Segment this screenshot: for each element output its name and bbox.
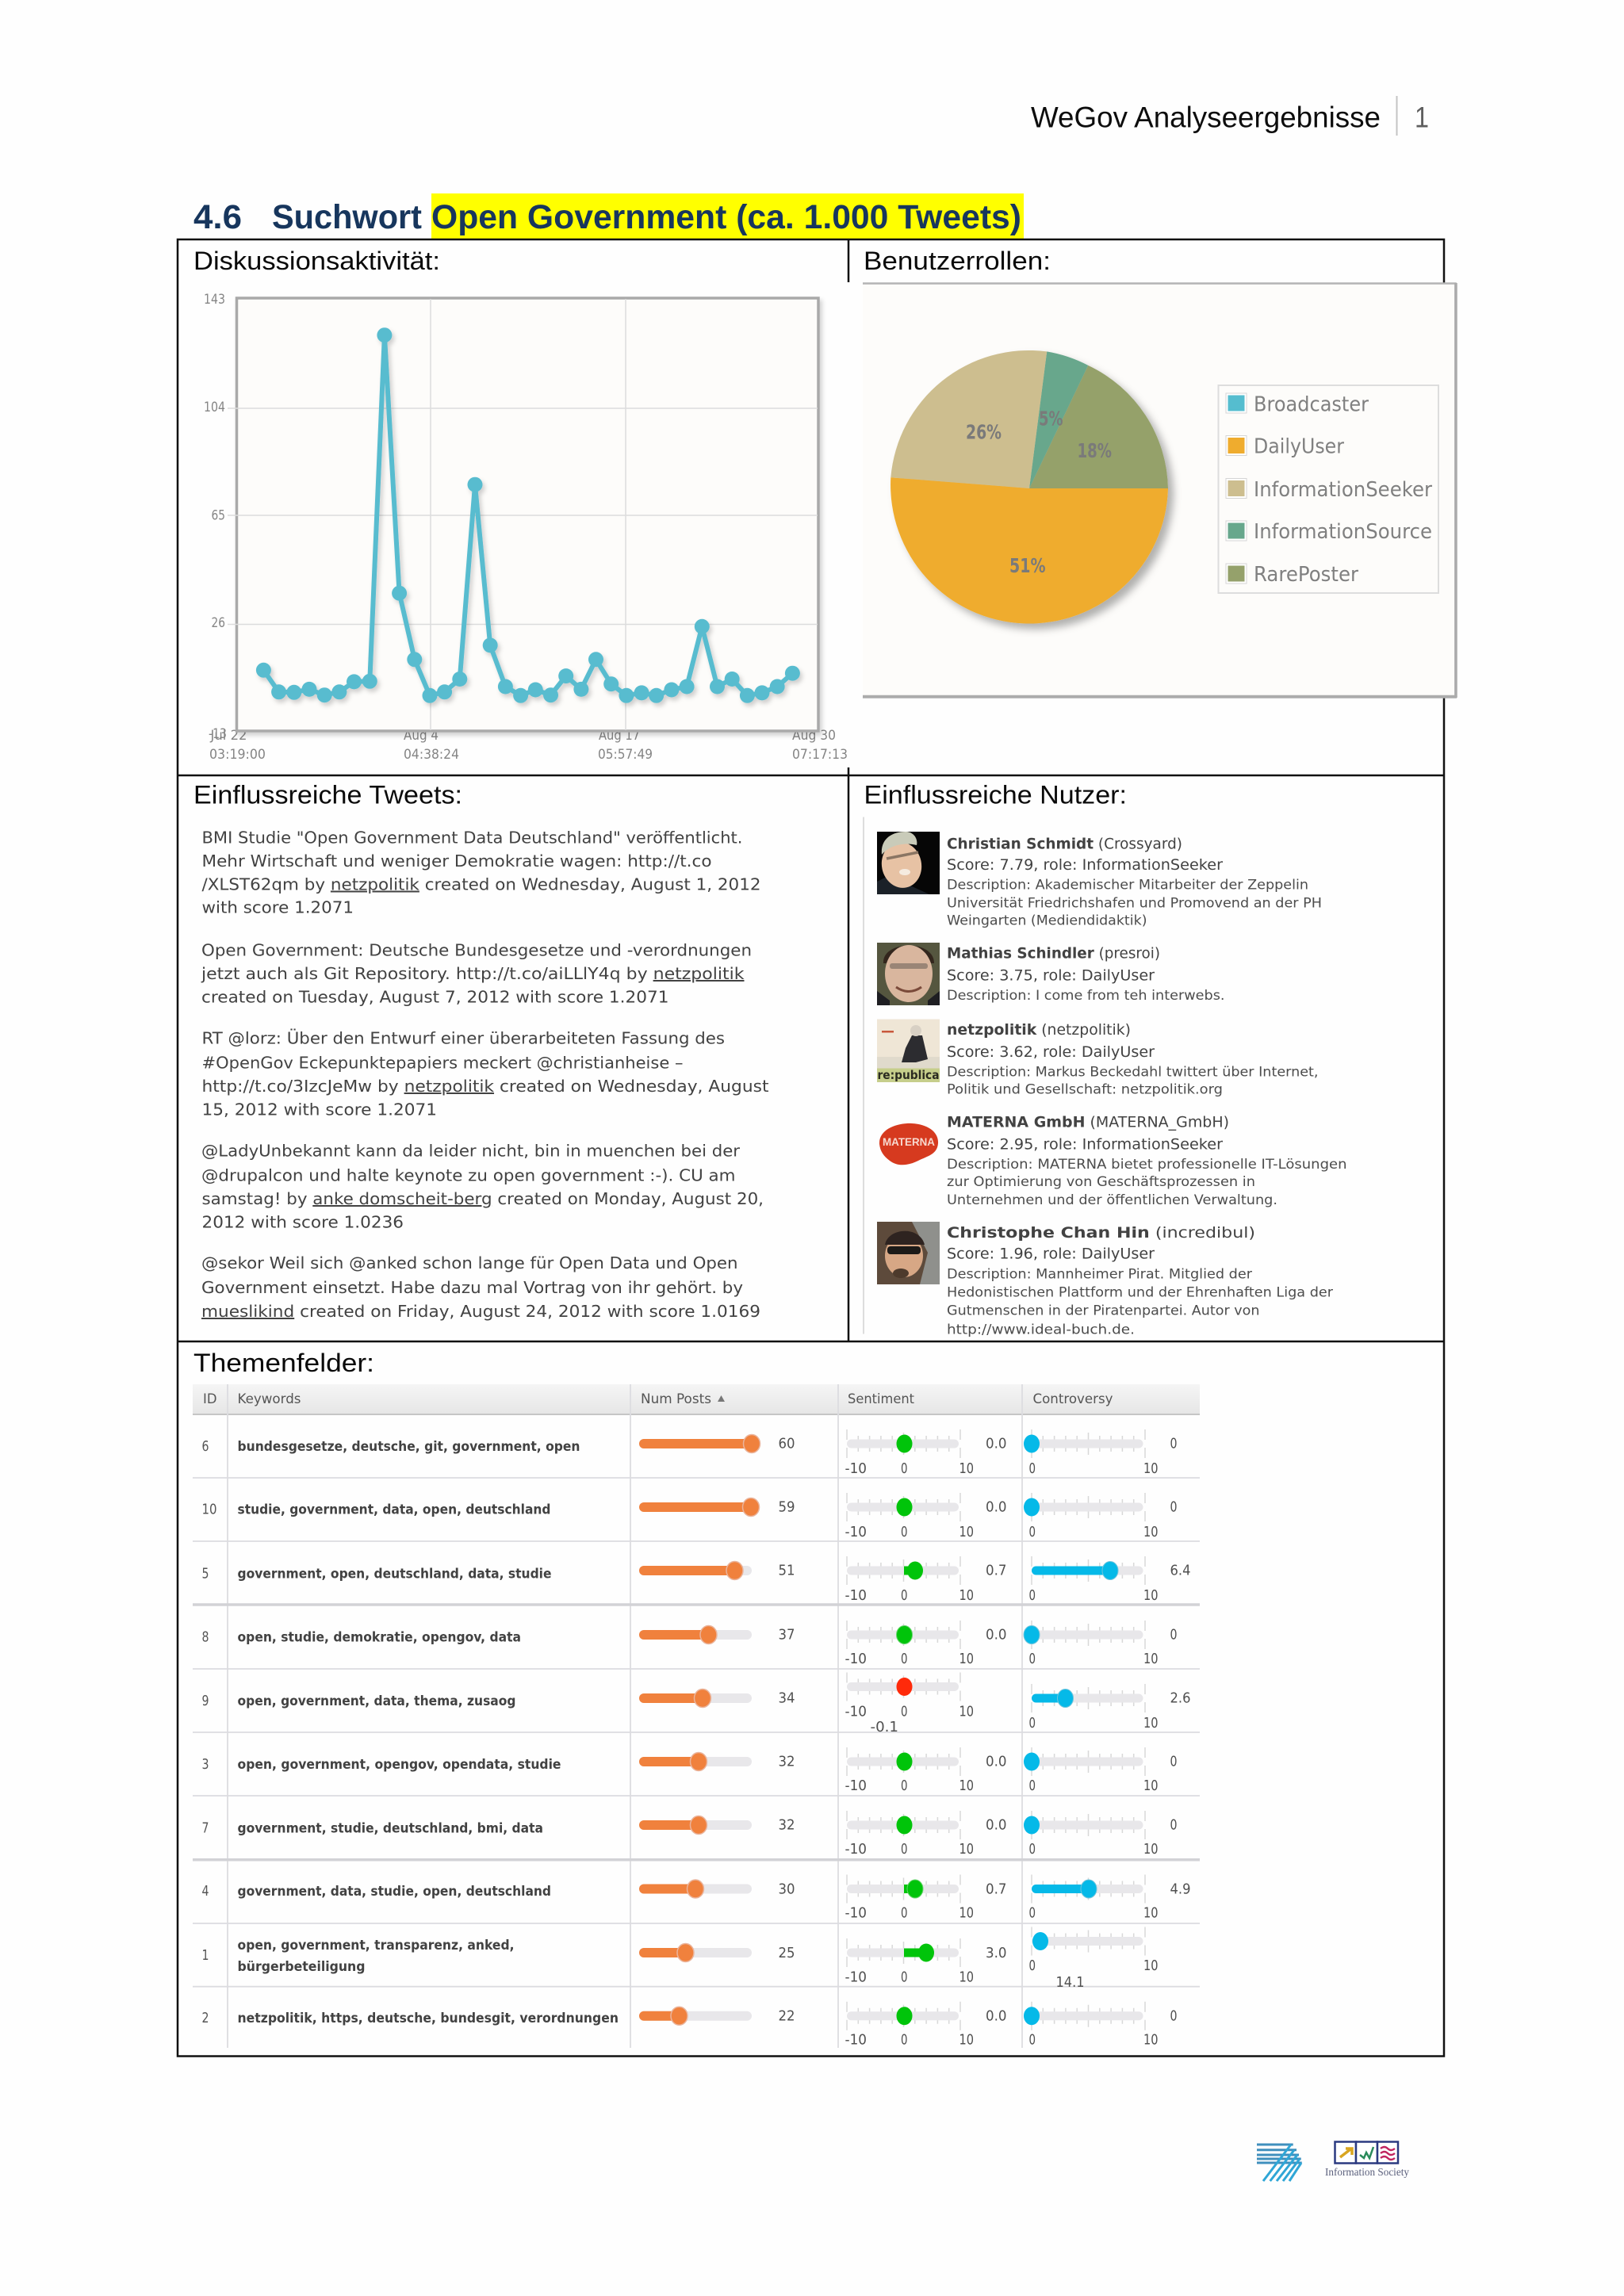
y axis labels: 104 <box>204 400 225 415</box>
row: topic 6: 0 <box>1170 1435 1177 1452</box>
x axis labels: Aug 4 <box>404 728 439 744</box>
pie legend: DailyUser <box>1254 434 1344 458</box>
row: topic 1: 3.0 <box>986 1945 1007 1961</box>
row: topic 6: 60 <box>779 1435 795 1452</box>
row: topic 9: -10 <box>845 1703 867 1720</box>
row: topic 5: government, open, deutschland, data, studie <box>238 1567 552 1582</box>
user: netzpolitik <box>877 1020 1318 1097</box>
tweet 4: samstag! by anke domscheit-berg created on Monday, August 20, <box>201 1189 764 1208</box>
tweet 5: mueslikind created on Friday, August 24, 2012 with score 1.0169 <box>201 1302 760 1321</box>
row: topic 2: -10 <box>845 2031 867 2049</box>
icon: avatar Christophe Chan Hin <box>877 1222 940 1284</box>
panel: influential users <box>863 817 1346 1338</box>
tweet 5 <box>201 1253 760 1321</box>
row: topic 9 <box>201 1673 1191 1735</box>
row: topic 9: 2.6 <box>1170 1690 1191 1706</box>
user: MATERNA GmbH: Unternehmen und der öffentlichen Verwaltung. <box>947 1192 1277 1208</box>
row: topic 5: -10 <box>845 1587 867 1604</box>
row: topic 9: open, government, data, thema, zusaog <box>238 1693 515 1709</box>
row: topic 2 <box>201 2002 1177 2049</box>
user: Mathias Schindler: Score: 3.75, role: DailyUser <box>947 967 1155 985</box>
x axis labels: Aug 17 <box>599 728 640 744</box>
row: topic 1: 0 <box>1029 1957 1036 1974</box>
row: topic 4: 4 <box>201 1883 209 1900</box>
table header: Keywords <box>238 1391 301 1407</box>
tweet 4 <box>201 1142 764 1232</box>
y axis labels <box>204 292 227 742</box>
user: netzpolitik: Description: Markus Beckedahl twittert über Internet, <box>947 1064 1318 1080</box>
row: topic 9: 10 <box>959 1703 974 1720</box>
user: Christian Schmidt: Universität Friedrichshafen und Promovend an der PH <box>947 896 1322 912</box>
row: topic 1: open, government, transparenz, anked, <box>238 1938 514 1954</box>
data series <box>256 327 800 703</box>
row: topic 4: -10 <box>845 1904 867 1922</box>
row: topic 3: 0.0 <box>986 1754 1007 1770</box>
user: Mathias Schindler: Description: I come from teh interwebs. <box>947 988 1224 1004</box>
row: topic 3: 3 <box>201 1756 209 1773</box>
row: topic 8: 0 <box>901 1651 907 1667</box>
row: topic 9: 10 <box>1143 1715 1158 1732</box>
row: topic 8: 0 <box>1170 1627 1177 1643</box>
row: topic 4: 10 <box>1143 1904 1158 1922</box>
row: topic 3: 10 <box>959 1777 974 1794</box>
row: topic 5: 5 <box>201 1565 209 1582</box>
row: topic 5: 0 <box>1029 1587 1036 1604</box>
row: topic 1: 14.1 <box>1056 1974 1085 1991</box>
row: topic 4: 4.9 <box>1170 1881 1191 1898</box>
row: topic 10: 59 <box>779 1498 795 1516</box>
user: netzpolitik: netzpolitik (netzpolitik) <box>947 1021 1131 1039</box>
row: topic 3: open, government, opengov, opendata, studie <box>238 1757 561 1773</box>
row: topic 3: 0 <box>1170 1754 1177 1770</box>
row: topic 3: -10 <box>845 1777 867 1794</box>
row: topic 6: 0 <box>901 1460 907 1477</box>
row: topic 2: 10 <box>1143 2031 1158 2049</box>
pie legend: RarePoster <box>1254 563 1358 587</box>
row: topic 8: 0 <box>1029 1651 1036 1667</box>
section heading: Einflussreiche Nutzer: Einflussreiche Nutzer: <box>864 780 1127 809</box>
row: topic 2: netzpolitik, https, deutsche, bundesgit, verordnungen <box>238 2011 619 2026</box>
tweet 2: created on Tuesday, August 7, 2012 with score 1.2071 <box>201 988 669 1007</box>
row: topic 6: 10 <box>1143 1460 1158 1477</box>
y axis labels: 65 <box>211 507 225 523</box>
tweet 1: BMI Studie "Open Government Data Deutschland" veröffentlicht. <box>201 828 742 847</box>
tweet 1: with score 1.2071 <box>201 897 354 916</box>
row: topic 1: 25 <box>779 1945 795 1961</box>
section heading: Themenfelder: Themenfelder: <box>193 1349 374 1377</box>
topic table <box>193 1384 1200 2049</box>
tweet 5: @sekor Weil sich @anked schon lange für Open Data und Open <box>201 1253 738 1272</box>
row: topic 1: -10 <box>845 1969 867 1985</box>
row: topic 7: 0 <box>901 1841 907 1858</box>
pie legend: Broadcaster <box>1254 393 1369 417</box>
row: topic 1: bürgerbeteiligung <box>238 1959 365 1975</box>
user: Mathias Schindler: Mathias Schindler (presroi) <box>947 945 1160 962</box>
row: topic 8: 10 <box>959 1651 974 1667</box>
plot frame <box>236 298 818 731</box>
panel: pie chart Benutzerrollen <box>863 283 1457 698</box>
row: topic 8: 8 <box>201 1628 209 1646</box>
icon: avatar re:publica <box>877 1020 940 1082</box>
row: topic 2: 22 <box>779 2007 795 2025</box>
row: topic 6: -10 <box>845 1460 867 1477</box>
row: topic 4 <box>201 1874 1191 1922</box>
row: topic 6 <box>201 1429 1177 1477</box>
icon: Information Society logo <box>1325 2142 1409 2179</box>
row: topic 4: 0 <box>901 1904 907 1922</box>
row: topic 5: 10 <box>959 1587 974 1604</box>
row: topic 4: 30 <box>779 1881 795 1898</box>
row: topic 3: 32 <box>779 1754 795 1770</box>
pie legend: InformationSeeker <box>1254 478 1432 502</box>
section heading: Einflussreiche Tweets: Einflussreiche Tweets: <box>193 780 462 809</box>
row: topic 2: 0.0 <box>986 2007 1007 2025</box>
row: topic 2: 0 <box>901 2031 907 2049</box>
row: topic 2: 0 <box>1029 2031 1036 2049</box>
user: MATERNA GmbH <box>879 1113 1346 1208</box>
row: topic 4: government, data, studie, open, deutschland <box>238 1884 551 1900</box>
row: topic 6: 0 <box>1029 1460 1036 1477</box>
row: topic 9: 0 <box>1029 1715 1036 1732</box>
tweet 1: Mehr Wirtschaft und weniger Demokratie wagen: http://t.co <box>201 851 712 871</box>
row: topic 5: 51 <box>779 1562 795 1579</box>
row: topic 10: 0 <box>1029 1524 1036 1540</box>
row: topic 1: 0 <box>901 1969 907 1985</box>
pie labels: 51% <box>1009 554 1045 577</box>
title: Suchwort <box>272 198 422 236</box>
tweet 2 <box>201 940 752 1007</box>
row: topic 2: 0 <box>1170 2007 1177 2025</box>
user: Christian Schmidt: Score: 7.79, role: InformationSeeker <box>947 856 1223 874</box>
row: topic 8: 10 <box>1143 1651 1158 1667</box>
tweet 3: 15, 2012 with score 1.2071 <box>201 1100 437 1119</box>
tweet 2: jetzt auch als Git Repository. http://t.co/aiLLlY4q by netzpolitik <box>201 964 745 983</box>
user: Christophe Chan Hin: Hedonistischen Plattform und der Ehrenhaften Liga der <box>947 1284 1333 1300</box>
pie labels: 26% <box>966 420 1002 444</box>
icon: logo MATERNA <box>879 1123 938 1165</box>
icon: avatar re:publica: re:publica <box>877 1068 939 1082</box>
row: topic 8: -10 <box>845 1651 867 1667</box>
row: topic 8 <box>201 1621 1177 1667</box>
row: topic 10 <box>201 1493 1177 1540</box>
row: topic 6: 6 <box>201 1438 209 1455</box>
row: topic 4: 0.7 <box>986 1881 1007 1898</box>
row: topic 1: 10 <box>1143 1957 1158 1974</box>
row: topic 3: 10 <box>1143 1777 1158 1794</box>
row: topic 1 <box>201 1927 1158 1991</box>
pie labels <box>966 408 1112 577</box>
tweet 2: Open Government: Deutsche Bundesgesetze und -verordnungen <box>201 940 752 959</box>
y axis labels: 143 <box>204 292 225 308</box>
row: topic 10: 0 <box>901 1524 907 1540</box>
pie labels: 5% <box>1039 408 1063 430</box>
user: netzpolitik: Politik und Gesellschaft: netzpolitik.org <box>947 1081 1223 1097</box>
title: 4.6 <box>193 198 242 236</box>
row: topic 7: 10 <box>959 1841 974 1858</box>
table frame <box>178 239 1444 2057</box>
row: topic 1: 10 <box>959 1969 974 1985</box>
y axis labels: -13 <box>209 726 227 742</box>
row: topic 6: bundesgesetze, deutsche, git, government, open <box>238 1439 580 1455</box>
row: topic 7: government, studie, deutschland, bmi, data <box>238 1820 543 1836</box>
user: MATERNA GmbH: MATERNA GmbH (MATERNA_GmbH) <box>947 1113 1229 1131</box>
row: topic 2: 10 <box>959 2031 974 2049</box>
user: Christophe Chan Hin: Description: Mannheimer Pirat. Mitglied der <box>947 1267 1252 1283</box>
table header: Sentiment <box>848 1391 914 1407</box>
tweet 1 <box>201 828 761 916</box>
pie legend: InformationSource <box>1254 520 1432 544</box>
row: topic 7: 0 <box>1029 1841 1036 1858</box>
row: topic 8: open, studie, demokratie, opengov, data <box>238 1630 521 1646</box>
user: Christophe Chan Hin: Christophe Chan Hin (incredibul) <box>947 1224 1255 1242</box>
x axis labels: Jul 22 <box>210 728 247 744</box>
user: Christophe Chan Hin: Score: 1.96, role: DailyUser <box>947 1245 1155 1262</box>
row: topic 5: 10 <box>1143 1587 1158 1604</box>
row: topic 9: -0.1 <box>871 1719 898 1735</box>
row: topic 6: 0.0 <box>986 1435 1007 1452</box>
icon: avatar Christian Schmidt <box>877 832 940 894</box>
row: topic 7: 7 <box>201 1820 209 1836</box>
row: topic 5: 0 <box>901 1587 907 1604</box>
user: Christian Schmidt: Description: Akademischer Mitarbeiter der Zeppelin <box>947 877 1308 893</box>
tweet 3: http://t.co/3IzcJeMw by netzpolitik created on Wednesday, August <box>201 1077 769 1096</box>
title: Open Government (ca. 1.000 Tweets) <box>431 198 1021 236</box>
table header: Num Posts <box>641 1391 711 1407</box>
x axis labels: 03:19:00 <box>209 747 266 763</box>
tweet 3 <box>201 1029 769 1119</box>
row: topic 4: 0 <box>1029 1904 1036 1922</box>
row: topic 10: 10 <box>201 1502 217 1517</box>
x axis labels: 07:17:13 <box>792 747 848 763</box>
row: topic 7 <box>201 1811 1177 1858</box>
line chart: Diskussionsaktivität <box>204 292 848 763</box>
user: MATERNA GmbH: Description: MATERNA bietet professionelle IT-Lösungen <box>947 1157 1346 1173</box>
tweet 4: @LadyUnbekannt kann da leider nicht, bin in muenchen bei der <box>201 1142 741 1161</box>
user: netzpolitik: Score: 3.62, role: DailyUser <box>947 1043 1155 1061</box>
section heading: Benutzerrollen: Benutzerrollen: <box>864 247 1051 275</box>
x axis labels: 04:38:24 <box>404 747 459 763</box>
x axis labels <box>209 728 848 763</box>
tweet 5: Government einsetzt. Habe dazu mal Vortrag von ihr gehört. by <box>201 1278 743 1297</box>
pie legend <box>1218 385 1438 593</box>
tweet 3: #OpenGov Eckepunktepapiers meckert @christianheise – <box>201 1053 684 1072</box>
row: topic 5 <box>201 1556 1191 1604</box>
table header <box>193 1384 1200 1415</box>
y axis labels: 26 <box>211 615 225 631</box>
icon: FP7 logo <box>1257 2145 1302 2181</box>
user: Christophe Chan Hin: http://www.ideal-buch.de. <box>947 1322 1135 1338</box>
row: topic 10: 0 <box>1170 1498 1177 1516</box>
row: topic 3 <box>201 1747 1177 1794</box>
row: topic 3: 0 <box>901 1777 907 1794</box>
row: topic 1: 1 <box>201 1947 209 1964</box>
row: topic 10: 0.0 <box>986 1498 1007 1516</box>
row: topic 6: 10 <box>959 1460 974 1477</box>
table header: ID <box>203 1391 217 1407</box>
user: MATERNA GmbH: Score: 2.95, role: InformationSeeker <box>947 1135 1223 1153</box>
title <box>193 193 1024 239</box>
row: topic 10: -10 <box>845 1524 867 1540</box>
row: topic 8: 0.0 <box>986 1627 1007 1643</box>
icon: Information Society logo: Information Society <box>1325 2167 1409 2179</box>
row: topic 9: 34 <box>779 1690 795 1706</box>
row: topic 7: 0.0 <box>986 1817 1007 1833</box>
section heading: Diskussionsaktivität: Diskussionsaktivität: <box>193 247 440 275</box>
user: Christophe Chan Hin <box>877 1222 1333 1338</box>
icon: logo MATERNA: MATERNA <box>883 1135 935 1148</box>
row: topic 7: 10 <box>1143 1841 1158 1858</box>
row: topic 5: 6.4 <box>1170 1562 1191 1579</box>
user: Christian Schmidt: Weingarten (Mediendidaktik) <box>947 913 1147 929</box>
x axis labels: 05:57:49 <box>598 747 653 763</box>
row: topic 10: 10 <box>1143 1524 1158 1540</box>
row: topic 8: 37 <box>779 1627 795 1643</box>
pie labels: 18% <box>1077 439 1112 462</box>
user: Christian Schmidt: Christian Schmidt (Crossyard) <box>947 836 1182 853</box>
page header: 1 <box>1415 101 1429 133</box>
tweet 4: @drupalcon und halte keynote zu open government :-). CU am <box>201 1165 736 1184</box>
row: topic 5: 0.7 <box>986 1562 1007 1579</box>
tweet 1: /XLST62qm by netzpolitik created on Wednesday, August 1, 2012 <box>201 875 761 894</box>
table header: Controversy <box>1032 1391 1113 1407</box>
row: topic 10: 10 <box>959 1524 974 1540</box>
tweet 4: 2012 with score 1.0236 <box>201 1213 404 1232</box>
row: topic 7: -10 <box>845 1841 867 1858</box>
user: Mathias Schindler <box>877 943 1224 1005</box>
pie slices <box>891 350 1168 624</box>
row: topic 9: 0 <box>901 1703 907 1720</box>
user: Christophe Chan Hin: Gutmenschen in der Piratenpartei. Autor von <box>947 1303 1259 1319</box>
panel: influential tweets <box>201 828 769 1321</box>
row: topic 4: 10 <box>959 1904 974 1922</box>
row: topic 3: 0 <box>1029 1777 1036 1794</box>
row: topic 7: 0 <box>1170 1817 1177 1833</box>
x axis labels: Aug 30 <box>792 728 836 744</box>
icon: avatar Mathias Schindler <box>877 943 940 1005</box>
page header: WeGov Analyseergebnisse <box>1031 101 1381 133</box>
row: topic 9: 9 <box>201 1693 209 1709</box>
row: topic 10: studie, government, data, open, deutschland <box>238 1502 550 1517</box>
tweet 3: RT @lorz: Über den Entwurf einer überarbeiteten Fassung des <box>201 1029 725 1048</box>
user: MATERNA GmbH: zur Optimierung von Geschäftsprozessen in <box>947 1174 1255 1190</box>
row: topic 2: 2 <box>201 2010 209 2026</box>
user: Christian Schmidt <box>877 832 1322 929</box>
row: topic 7: 32 <box>779 1817 795 1833</box>
